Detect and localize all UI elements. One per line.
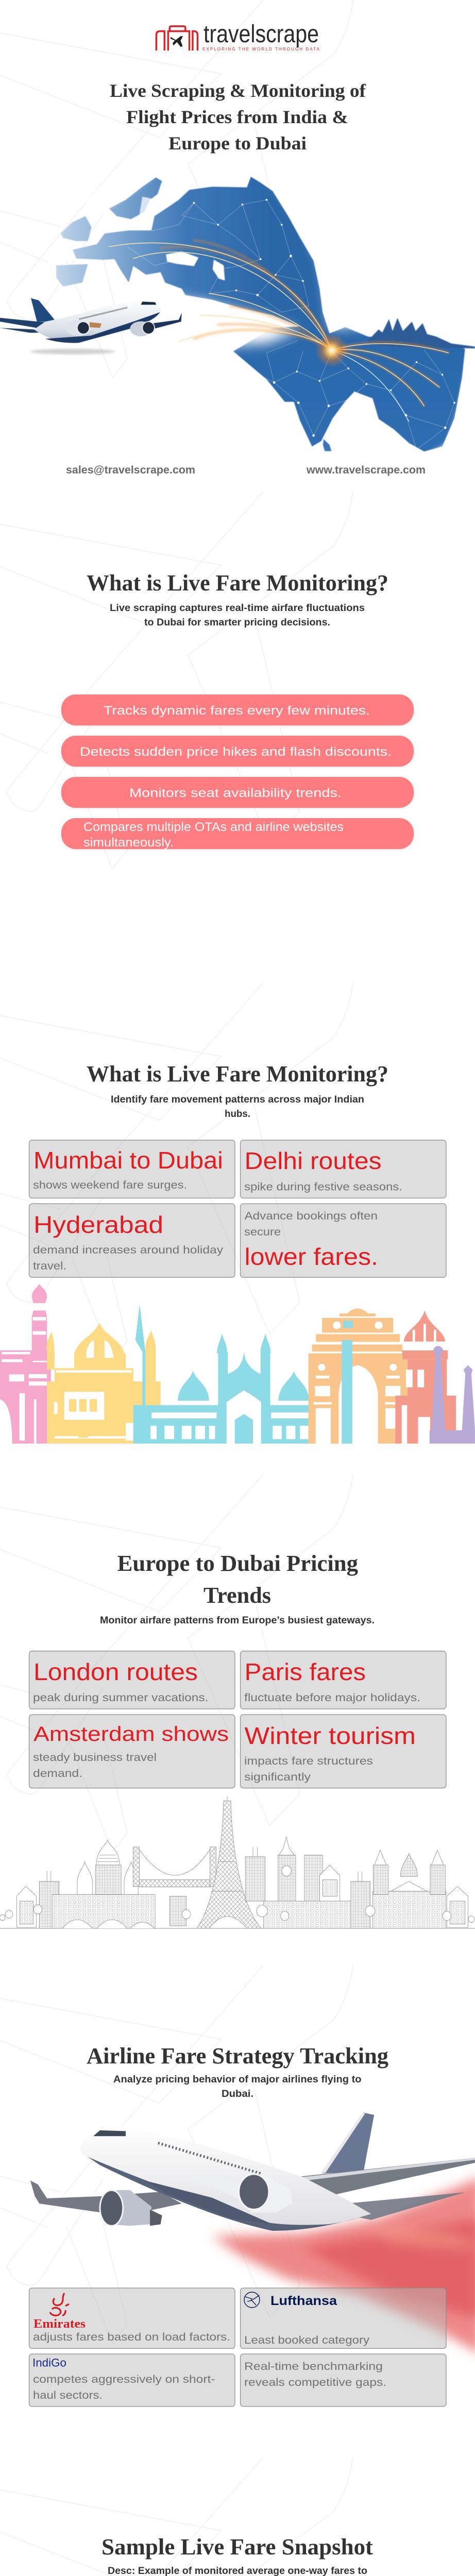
- card: Emirates: [29, 2288, 235, 2348]
- card: IndiGo: haul sectors.: [33, 2389, 103, 2401]
- pill: compares OTAs: simultaneously.: [83, 836, 174, 850]
- pill: detects price hikes: [61, 736, 414, 767]
- skyline: India landmarks: [0, 1284, 475, 1444]
- card: Emirates: adjusts fares based on load factors.: [33, 2331, 230, 2343]
- card: Paris fares: [240, 1651, 446, 1709]
- title: Flight Prices from India &: [126, 107, 348, 127]
- airplane with red trail: [30, 2112, 475, 2354]
- card: Hyderabad: Hyderabad: [33, 1211, 163, 1238]
- card: Winter tourism: Winter tourism: [244, 1722, 416, 1749]
- subheading: Monitor airfare patterns from Europe’s busiest gateways.: [100, 1615, 375, 1626]
- card: Delhi routes: [240, 1140, 446, 1198]
- card: Amsterdam shows: steady business travel: [33, 1752, 157, 1764]
- card: Mumbai to Dubai: Mumbai to Dubai: [33, 1147, 223, 1174]
- pill: detects price hikes: Detects sudden price hikes and flash discounts.: [80, 745, 392, 759]
- panel: Europe to Dubai: [0, 1551, 475, 1928]
- title: [110, 80, 366, 154]
- panel: hero: [0, 21, 475, 476]
- pill: compares OTAs: [61, 818, 414, 850]
- subheading: [113, 2074, 362, 2099]
- card: Paris fares: Paris fares: [244, 1658, 366, 1685]
- heading: Europe to Dubai Pricing: [117, 1551, 358, 1576]
- card: Amsterdam shows: [29, 1715, 235, 1788]
- subheading: Identify fare movement patterns across major Indian: [111, 1094, 364, 1105]
- logo: travelscrape: [156, 21, 320, 52]
- card: London routes: London routes: [33, 1658, 198, 1685]
- title: Europe to Dubai: [168, 133, 307, 154]
- icon: red suitcase: [156, 26, 197, 50]
- subheading: hubs.: [225, 1109, 250, 1120]
- icon: Emirates calligraphy: [50, 2293, 69, 2315]
- card: advance bookings: lower fares.: [244, 1243, 378, 1270]
- card: Lufthansa: [240, 2288, 446, 2348]
- purple minar: [430, 1346, 475, 1444]
- card: Hyderabad: [29, 1204, 235, 1277]
- subheading: Live scraping captures real-time airfare fluctuations: [110, 603, 365, 614]
- card: benchmarking: reveals competitive gaps.: [244, 2377, 386, 2388]
- pill: tracks fares: Tracks dynamic fares every few minutes.: [104, 704, 370, 718]
- subheading: [111, 1094, 364, 1120]
- heading: [117, 1551, 358, 1608]
- subheading: Dubai.: [222, 2089, 253, 2099]
- card: Lufthansa: Least booked category: [244, 2334, 370, 2346]
- cyan mosque: [133, 1304, 354, 1444]
- airplane: [0, 298, 182, 354]
- heading: Trends: [203, 1583, 271, 1608]
- panel: India routes: [0, 1061, 475, 1444]
- icon: Lufthansa crane: [244, 2292, 260, 2308]
- card: London routes: peak during summer vacations.: [33, 1692, 209, 1704]
- contact: website: www.travelscrape.com: [306, 464, 426, 476]
- card: IndiGo: IndiGo: [32, 2357, 66, 2369]
- salmon palace: [395, 1311, 456, 1444]
- card: Amsterdam shows: demand.: [33, 1768, 82, 1780]
- card: Lufthansa: Lufthansa: [270, 2294, 337, 2308]
- map: Europe to India flight routes with airplane: [0, 168, 475, 459]
- title: Live Scraping & Monitoring of: [110, 80, 366, 101]
- pill: seat availability: Monitors seat availability trends.: [129, 786, 342, 800]
- pink fort: [0, 1284, 51, 1444]
- pill: seat availability: [61, 777, 414, 808]
- yellow palace: [47, 1323, 161, 1444]
- card: London routes: [29, 1651, 235, 1709]
- heading: What is Live Fare Monitoring?: [87, 1061, 388, 1087]
- logo: travelscrape: EXPLORING THE WORLD THROUGH DATA: [202, 47, 320, 52]
- panel: airline strategy tracking: [29, 2043, 475, 2406]
- orange gate: [309, 1309, 408, 1444]
- card: IndiGo: [29, 2354, 235, 2406]
- subheading: to Dubai for smarter pricing decisions.: [144, 617, 330, 628]
- card: Mumbai to Dubai: [29, 1140, 235, 1198]
- card: Delhi routes: spike during festive seasons.: [244, 1181, 402, 1193]
- heading: Airline Fare Strategy Tracking: [87, 2043, 388, 2069]
- card: Paris fares: fluctuate before major holidays.: [244, 1692, 420, 1704]
- card: Delhi routes: Delhi routes: [244, 1147, 381, 1174]
- contact: email: sales@travelscrape.com: [66, 464, 195, 476]
- heading: What is Live Fare Monitoring?: [87, 570, 388, 596]
- subheading: [110, 603, 365, 628]
- card: Winter tourism: [240, 1715, 446, 1788]
- card: Amsterdam shows: Amsterdam shows: [33, 1723, 229, 1745]
- skyline: Europe line art: [0, 1796, 475, 1928]
- card: advance bookings: Advance bookings often: [244, 1210, 378, 1222]
- card: Hyderabad: travel.: [33, 1260, 66, 1272]
- card: advance bookings: [240, 1204, 446, 1277]
- pill: tracks fares: [61, 694, 414, 725]
- card: Winter tourism: significantly: [244, 1771, 311, 1783]
- logo: travelscrape: travelscrape: [203, 21, 319, 48]
- pill: compares OTAs: Compares multiple OTAs and airline websites: [83, 820, 344, 834]
- card: IndiGo: competes aggressively on short-: [33, 2374, 215, 2385]
- card: Emirates: Emirates: [33, 2317, 86, 2331]
- panel: fare snapshot: [16, 2534, 459, 2576]
- flight routes glow: [109, 241, 448, 421]
- panel: what is live fare monitoring: [61, 570, 414, 850]
- card: Mumbai to Dubai: shows weekend fare surges.: [33, 1179, 187, 1191]
- heading: Sample Live Fare Snapshot: [101, 2534, 373, 2560]
- network lines: [127, 200, 454, 450]
- subheading: Analyze pricing behavior of major airlines flying to: [113, 2074, 362, 2085]
- card: advance bookings: secure: [244, 1226, 281, 1238]
- card: Winter tourism: impacts fare structures: [244, 1755, 373, 1767]
- card: Hyderabad: demand increases around holiday: [33, 1244, 224, 1256]
- card: benchmarking: [240, 2354, 446, 2406]
- card: benchmarking: Real-time benchmarking: [244, 2361, 383, 2372]
